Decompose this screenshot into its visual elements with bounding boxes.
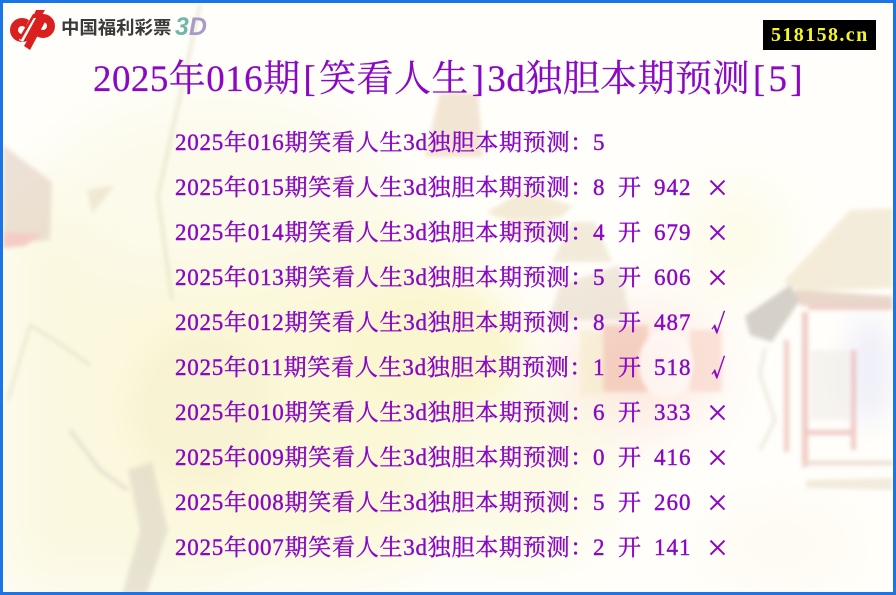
row: issue 011 — [175, 349, 725, 383]
row: issue 010: 开 — [618, 400, 642, 425]
row: issue 010: 6 — [593, 400, 605, 425]
row: issue 014: 4 — [593, 220, 605, 245]
row: issue 008: 开 — [618, 490, 642, 515]
icon: red lottery emblem — [10, 10, 55, 50]
row: issue 009: × — [706, 439, 730, 473]
row: issue 009: 416 — [654, 445, 692, 470]
website badge: 518158.cn — [771, 24, 869, 46]
row: issue 011: 1 — [593, 355, 605, 380]
row: issue 012: 487 — [654, 310, 692, 335]
title: [ — [753, 59, 766, 100]
row: issue 014 — [175, 214, 730, 248]
title: ] — [472, 59, 485, 100]
row: issue 015: × — [706, 169, 730, 203]
row: issue 014: 679 — [654, 220, 692, 245]
row: issue 007 — [175, 529, 730, 563]
row: issue 015 — [175, 169, 730, 203]
row: issue 008 — [175, 484, 730, 518]
title: 2025年016期 笑看人生 3d独胆本期预测 5 — [93, 59, 787, 100]
row: issue 007: × — [706, 529, 730, 563]
row: issue 016: 2025年016期笑看人生3d独胆本期预测： — [175, 130, 594, 155]
logo wordmark: 中国福利彩票 — [61, 14, 171, 40]
row: issue 009: 开 — [618, 445, 642, 470]
logo 3D mark: 3D — [175, 13, 207, 41]
row: issue 013: 开 — [618, 265, 642, 290]
row: issue 007: 2025年007期笑看人生3d独胆本期预测： — [175, 535, 594, 560]
row: issue 013: × — [706, 259, 730, 293]
row: issue 011: 518 — [654, 355, 692, 380]
row: issue 010 — [175, 394, 730, 428]
website badge — [763, 20, 876, 50]
right pavilion roof — [783, 208, 893, 292]
row: issue 016: 5 — [593, 130, 605, 155]
row: issue 008: 5 — [593, 490, 605, 515]
title: [ — [303, 59, 316, 100]
row: issue 012: 2025年012期笑看人生3d独胆本期预测： — [175, 310, 594, 335]
branches — [158, 5, 200, 300]
row: issue 013 — [175, 259, 730, 293]
row: issue 008: 2025年008期笑看人生3d独胆本期预测： — [175, 490, 594, 515]
logo: China Welfare Lottery 3D — [10, 10, 207, 50]
row: issue 012: 开 — [618, 310, 642, 335]
row: issue 013: 2025年013期笑看人生3d独胆本期预测： — [175, 265, 594, 290]
right pavilion pillars — [784, 340, 789, 452]
prediction list — [175, 130, 730, 563]
row: issue 010: 2025年010期笑看人生3d独胆本期预测： — [175, 400, 594, 425]
row: issue 009: 0 — [593, 445, 605, 470]
row: issue 015: 2025年015期笑看人生3d独胆本期预测： — [175, 175, 594, 200]
title: ] — [790, 59, 803, 100]
row: issue 011: 2025年011期笑看人生3d独胆本期预测： — [175, 355, 593, 380]
row: issue 012: 8 — [593, 310, 605, 335]
row: issue 013: 5 — [593, 265, 605, 290]
row: issue 010: × — [706, 394, 730, 428]
row: issue 007: 2 — [593, 535, 605, 560]
row: issue 014: 2025年014期笑看人生3d独胆本期预测： — [175, 220, 594, 245]
tree trunk — [122, 462, 168, 595]
row: issue 015: 开 — [618, 175, 642, 200]
row: issue 012 — [175, 304, 725, 338]
row: issue 014: 开 — [618, 220, 642, 245]
row: issue 009 — [175, 439, 730, 473]
row: issue 015: 8 — [593, 175, 605, 200]
row: issue 011: 开 — [618, 355, 642, 380]
row: issue 015: 942 — [654, 175, 692, 200]
row: issue 010: 333 — [654, 400, 692, 425]
row: issue 008: × — [706, 484, 730, 518]
row: issue 009: 2025年009期笑看人生3d独胆本期预测： — [175, 445, 594, 470]
row: issue 007: 141 — [654, 535, 692, 560]
row: issue 007: 开 — [618, 535, 642, 560]
row: issue 014: × — [706, 214, 730, 248]
row: issue 008: 260 — [654, 490, 692, 515]
left pavilion — [3, 145, 52, 245]
pagoda tiers — [425, 93, 483, 157]
row: issue 013: 606 — [654, 265, 692, 290]
